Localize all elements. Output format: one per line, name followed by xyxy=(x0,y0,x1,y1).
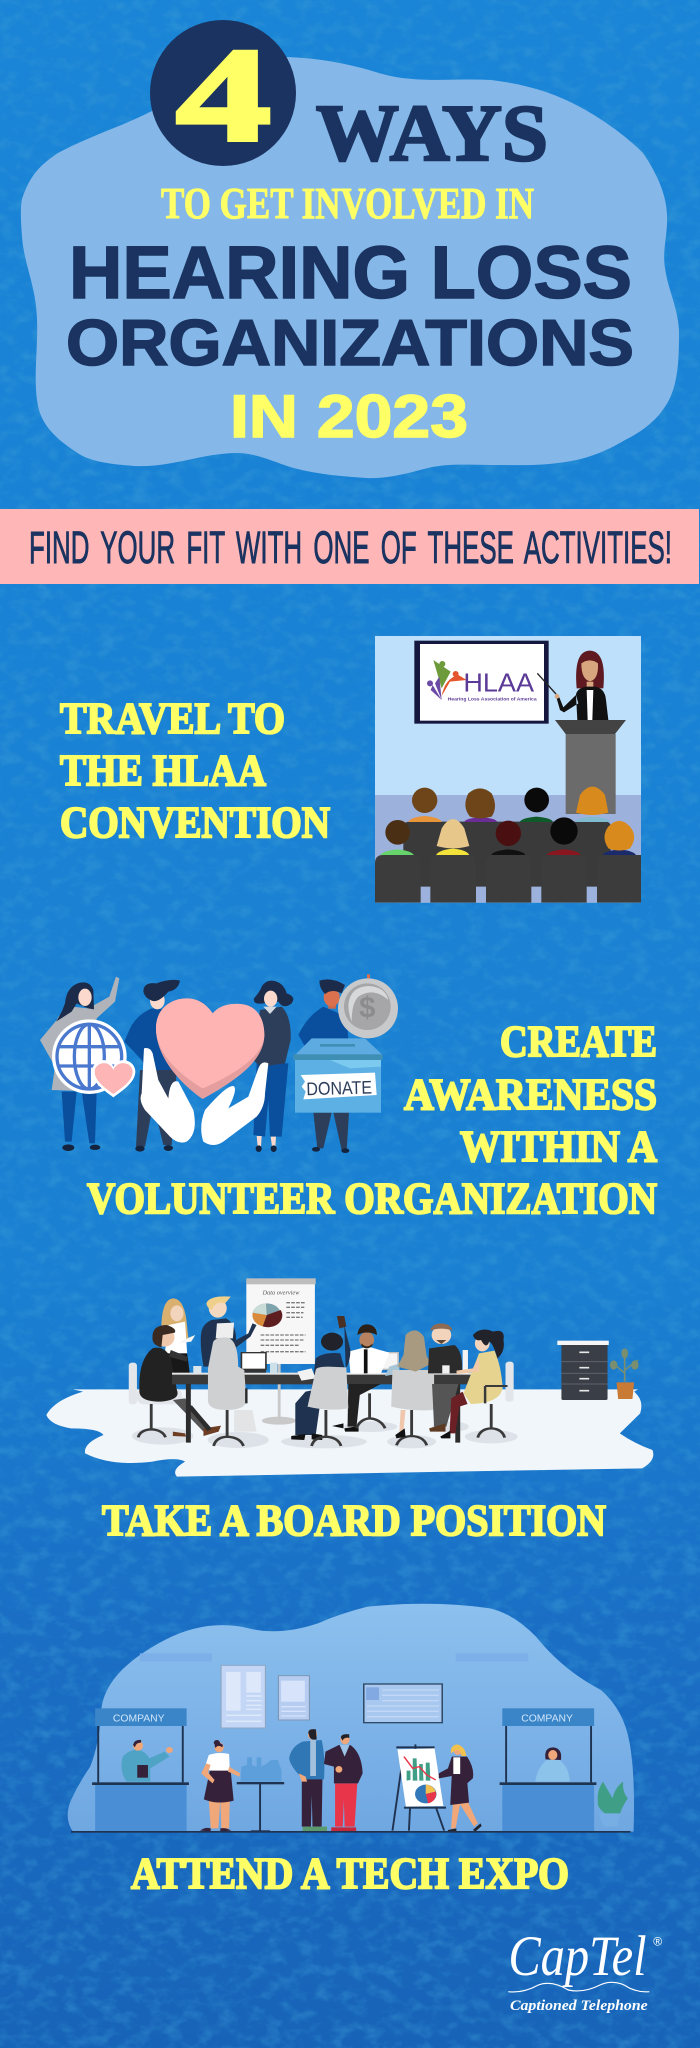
floor shadows xyxy=(132,1421,518,1448)
wall posters xyxy=(221,1665,442,1728)
heading: hearing loss: HEARING LOSS xyxy=(69,231,632,314)
text: create awareness within a volunteer organization: WITHIN A xyxy=(460,1122,657,1171)
banner xyxy=(0,509,699,584)
left booth: COMPANY xyxy=(113,1713,165,1724)
screen with HLAA logo: HLAA xyxy=(463,668,535,698)
CapTel logo xyxy=(508,1925,662,2014)
volunteer with donation box and coin xyxy=(293,974,398,1153)
chair back, presenter side xyxy=(208,1337,257,1446)
illustration: volunteers with heart and donate box xyxy=(40,974,398,1153)
white floor blob xyxy=(46,1389,653,1477)
potted plant xyxy=(610,1348,639,1399)
audience back row xyxy=(408,787,610,822)
text: travel to the HLAA convention: TRAVEL TO xyxy=(60,694,285,743)
screen with HLAA logo: Hearing Loss Association of America xyxy=(448,696,537,702)
ponytail woman xyxy=(440,1329,514,1438)
bearded man xyxy=(428,1323,468,1432)
blonde presenter xyxy=(201,1296,257,1367)
turban man xyxy=(332,1324,389,1432)
text: travel to the HLAA convention xyxy=(60,694,330,847)
screen with HLAA logo xyxy=(414,641,549,724)
table xyxy=(172,1353,473,1443)
illustration: HLAA conference room xyxy=(375,636,641,903)
text: travel to the HLAA convention: THE HLAA xyxy=(60,746,266,795)
presenter xyxy=(537,651,608,720)
illustration: board meeting xyxy=(46,1278,653,1477)
heading: ways: WAYS xyxy=(316,90,548,178)
text: create awareness within a volunteer organization: CREATE xyxy=(500,1017,657,1066)
seated men and chair backs, left xyxy=(129,1325,221,1437)
filing cabinet xyxy=(557,1341,609,1400)
podium xyxy=(555,720,626,814)
text: create awareness within a volunteer organization: AWARENESS xyxy=(404,1070,657,1119)
two men talking xyxy=(289,1729,363,1831)
heading: in 2023: IN 2023 xyxy=(230,383,468,450)
left booth xyxy=(92,1708,189,1832)
volunteer with donation box and coin: DONATE xyxy=(306,1076,372,1099)
right booth: COMPANY xyxy=(521,1713,573,1724)
expo blob xyxy=(68,1604,634,1832)
heading: organizations: ORGANIZATIONS xyxy=(66,306,634,379)
long-haired woman xyxy=(385,1330,434,1445)
flip chart xyxy=(246,1278,316,1425)
CapTel logo: Captioned Telephone xyxy=(510,1998,648,2014)
number 4 badge xyxy=(150,20,296,169)
front row seats xyxy=(375,855,641,903)
volunteer in blue sweater xyxy=(124,980,180,1152)
title block xyxy=(21,20,679,478)
expo plant xyxy=(598,1782,628,1827)
number 4 badge: 4 xyxy=(176,21,271,169)
text: take a board position: TAKE A BOARD POSITION xyxy=(102,1496,606,1545)
title blob xyxy=(21,57,679,478)
volunteer in dark top xyxy=(253,981,293,1152)
volunteer with globe xyxy=(40,977,135,1151)
CapTel logo: CapTel xyxy=(508,1925,647,1988)
text: travel to the HLAA convention: CONVENTION xyxy=(60,798,330,847)
flip chart presenter xyxy=(392,1744,482,1831)
volunteer with donation box and coin: $ xyxy=(359,991,375,1024)
audience front row xyxy=(380,817,636,855)
right booth xyxy=(500,1708,596,1832)
illustration: tech expo xyxy=(68,1604,634,1833)
back row seats xyxy=(403,822,611,887)
booth attendant xyxy=(92,1740,189,1785)
text: attend a tech expo: ATTEND A TECH EXPO xyxy=(131,1849,569,1898)
text: create awareness within a volunteer organization xyxy=(87,1017,657,1223)
CapTel logo: ® xyxy=(653,1935,662,1949)
ceiling lights xyxy=(140,1653,528,1662)
booth attendant xyxy=(500,1747,596,1785)
flip chart: Data overview xyxy=(262,1289,300,1296)
heart held by hands xyxy=(141,998,268,1145)
floor line xyxy=(71,1831,630,1833)
man with raised hand xyxy=(291,1316,350,1446)
standing blonde woman xyxy=(161,1298,195,1375)
woman in white top and bar table xyxy=(200,1740,284,1832)
heading: to get involved in: TO GET INVOLVED IN xyxy=(161,179,534,228)
